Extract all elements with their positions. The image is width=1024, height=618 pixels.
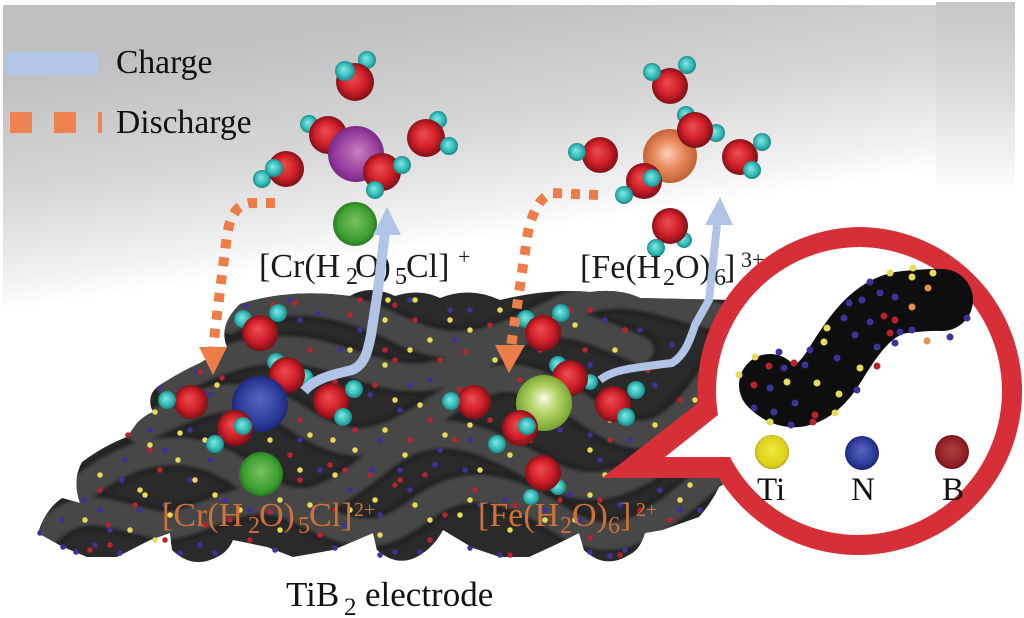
label: Cr complex: 5: [395, 264, 407, 290]
label: reduced Fe complex: [Fe(H: [478, 497, 559, 534]
label: reduced Cr complex: [Cr(H: [162, 497, 243, 534]
callout interior: [665, 247, 1002, 535]
label: reduced Cr complex: Cl]: [309, 497, 352, 534]
label: reduced Fe complex: 6: [608, 513, 620, 539]
fibre dots: boron: [754, 316, 895, 422]
label: Cr complex: Cl]: [406, 248, 449, 285]
label: reduced Fe complex: O): [572, 497, 608, 534]
background gradient: [3, 2, 1015, 340]
legend: charge label: Charge: [116, 44, 212, 81]
label: reduced Cr complex: 2: [248, 513, 260, 539]
callout ring: [602, 227, 1022, 555]
label: Cr complex: 2: [346, 264, 358, 290]
electrode dots: boron: [90, 300, 680, 555]
legend sphere: N: [845, 436, 879, 470]
label: Cr complex: +: [458, 244, 470, 269]
TiB2 electrode surface: [30, 285, 740, 570]
molecule: chromium complex top: [253, 51, 458, 246]
molecule: iron complex on electrode: [442, 304, 645, 505]
label: reduced Fe complex: 2: [560, 513, 572, 539]
legend: [5, 44, 252, 141]
zoomed fibre: [739, 268, 967, 425]
label: N: N: [851, 472, 875, 508]
electrode dots: titanium: [85, 300, 695, 540]
arrow: charge, Cr: [304, 207, 401, 391]
callout: magnified electrode: [602, 227, 1022, 555]
legend sphere: B: [935, 435, 969, 469]
fibre dots: orange: [912, 288, 928, 341]
label: reduced Cr complex: O): [259, 497, 295, 534]
label: reduced Cr complex: 5: [298, 513, 310, 539]
caption: TiB2 electrode: TiB: [286, 575, 339, 614]
arrow: discharge, Cr: [199, 203, 275, 375]
molecule: chromium complex on electrode: [158, 304, 363, 496]
legend sphere: Ti: [755, 435, 789, 469]
label: Cr complex: [Cr(H: [259, 248, 340, 285]
label: Cr complex: O): [355, 248, 391, 285]
label: reduced Fe complex: ]: [620, 497, 631, 534]
label: Fe complex: O): [675, 249, 711, 286]
legend: discharge swatch: [10, 112, 102, 133]
electrode dots: nitrogen: [40, 300, 700, 556]
legend: charge swatch: [5, 52, 98, 75]
fibre dots: nitrogen: [754, 282, 967, 425]
caption: TiB2 electrode: electrode: [365, 575, 493, 614]
arrow: discharge, Fe: [495, 193, 598, 373]
label: Fe complex: 3+: [741, 247, 764, 272]
fibre dots: titanium: [739, 268, 933, 422]
label: Fe complex: [Fe(H: [580, 249, 661, 286]
legend: discharge label: Discharge: [116, 104, 252, 141]
label: Fe complex: 6: [714, 265, 726, 291]
label: reduced Cr complex: 2+: [354, 499, 375, 521]
label: reduced Fe complex: 2+: [636, 499, 657, 521]
label: Fe complex: ]: [724, 249, 735, 286]
molecule: iron complex top: [568, 56, 771, 257]
label: Fe complex: 2: [663, 265, 675, 291]
label: B: B: [942, 472, 964, 508]
arrow: charge, Fe: [600, 197, 733, 380]
label: Ti: Ti: [757, 472, 785, 508]
